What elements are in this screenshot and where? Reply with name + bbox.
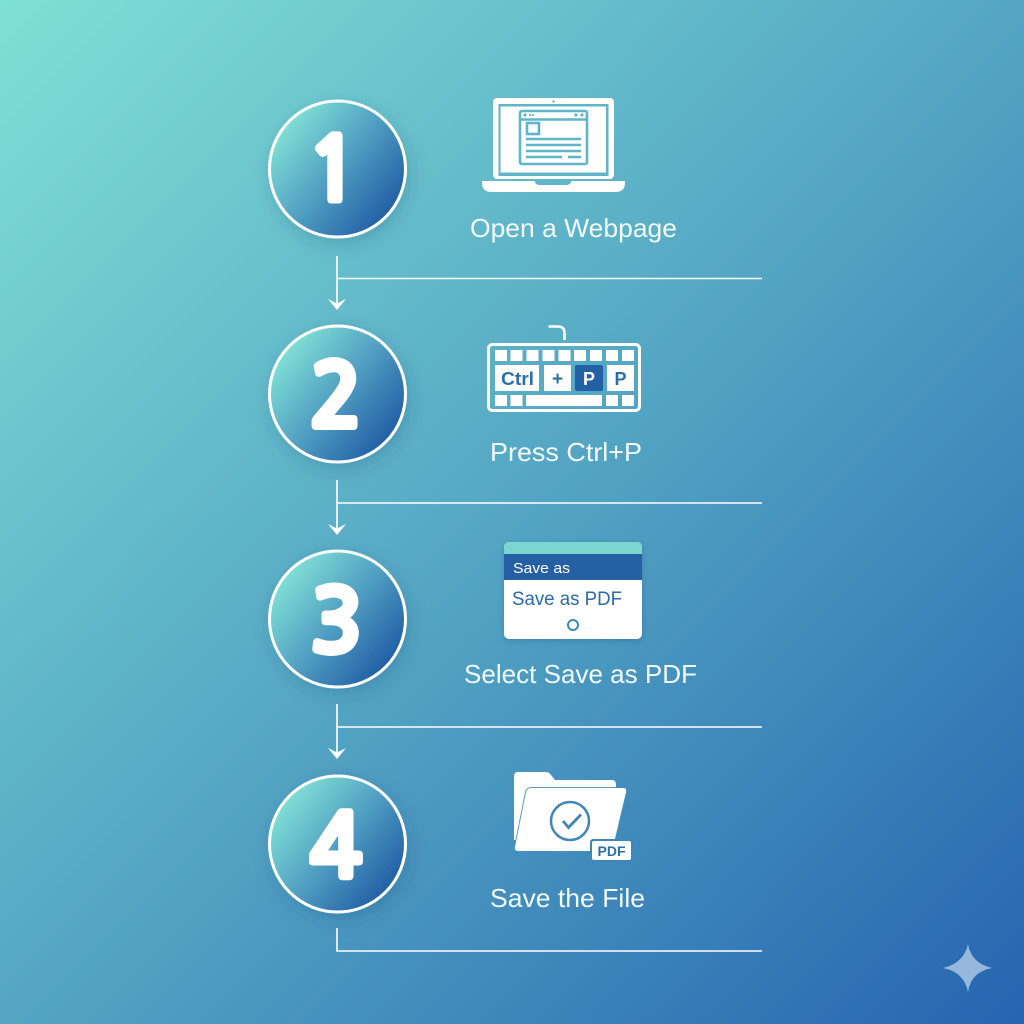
- icon: save as dialog: [504, 542, 642, 639]
- icon: folder with check and PDF badge: [514, 772, 633, 862]
- step 4 number badge: [270, 776, 406, 912]
- icon: save as dialog: Save as PDF: [512, 589, 622, 610]
- step 3 number badge: 3: [310, 579, 363, 665]
- step 2 number badge: 2: [310, 354, 362, 440]
- icon: folder with check and PDF badge: PDF: [598, 843, 626, 859]
- arrow: step 2 to step 3: [328, 480, 762, 535]
- icon: laptop with webpage: [482, 98, 625, 192]
- icon: save as dialog: Save as: [513, 560, 570, 577]
- closing connector line: [337, 928, 762, 951]
- step 1 number badge: [270, 101, 406, 237]
- step 1 number badge: 1: [307, 127, 359, 213]
- icon: keyboard Ctrl + P: Ctrl: [501, 369, 534, 389]
- label: Select Save as PDF: Select Save as PDF: [464, 659, 697, 689]
- step 4 number badge: 4: [310, 804, 362, 890]
- step 3 number badge: [270, 551, 406, 687]
- icon: keyboard Ctrl + P: P: [614, 369, 627, 389]
- label: Open a Webpage: Open a Webpage: [470, 213, 677, 243]
- icon: keyboard Ctrl + P: P: [583, 369, 595, 389]
- icon: sparkle watermark: [943, 944, 992, 992]
- icon: keyboard Ctrl + P: +: [552, 369, 563, 390]
- arrow: step 3 to step 4: [328, 704, 762, 759]
- arrow: step 1 to step 2: [328, 256, 762, 310]
- icon: keyboard Ctrl + P: [488, 326, 640, 410]
- label: Save the File: Save the File: [490, 883, 645, 913]
- step 2 number badge: [270, 326, 406, 462]
- label: Press Ctrl+P: Press Ctrl+P: [490, 437, 642, 467]
